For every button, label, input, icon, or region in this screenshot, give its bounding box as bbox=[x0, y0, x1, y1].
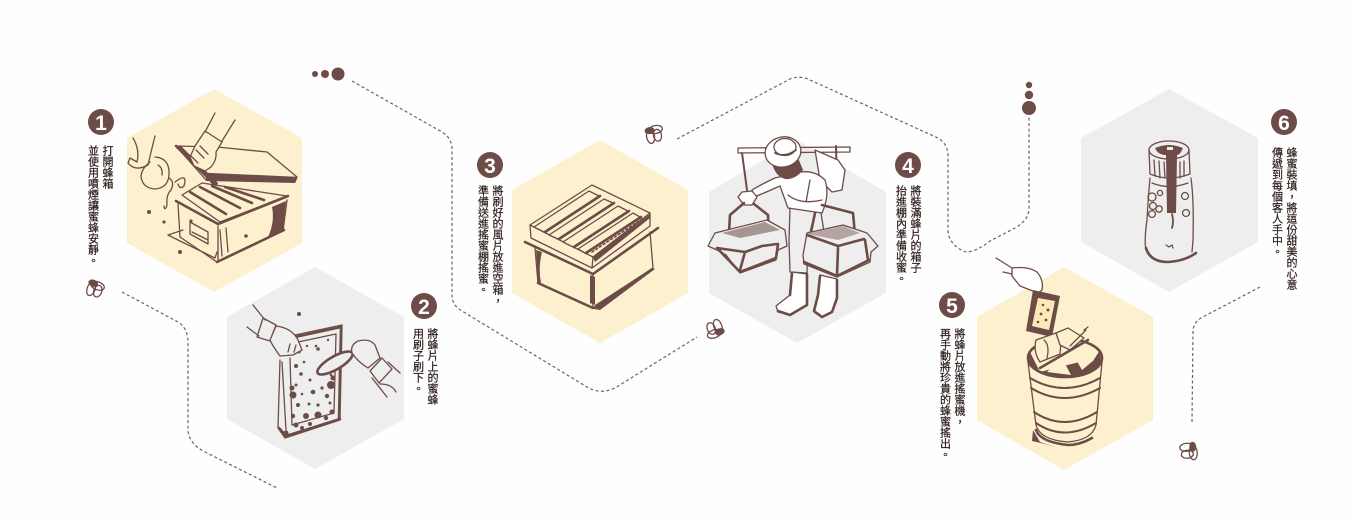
text: step 5: 將蜂片放進搖蜜機， bbox=[953, 328, 965, 427]
hexagon: step 5 bbox=[977, 267, 1153, 470]
number badge 4: 4 bbox=[902, 155, 914, 178]
shoulder pole and ropes bbox=[738, 147, 850, 153]
text: step 1: 並使用噴煙讓蜜蜂安靜。 bbox=[86, 145, 98, 266]
trousers bbox=[789, 208, 824, 273]
number badge 1 bbox=[88, 109, 114, 135]
hexagon: step 3 bbox=[512, 140, 688, 343]
frame bars bbox=[534, 191, 599, 232]
gloved hand on lid bbox=[190, 131, 222, 171]
right hand bbox=[352, 340, 380, 368]
left box bbox=[708, 220, 787, 273]
hooks bbox=[729, 203, 855, 235]
hexagon: step 6 bbox=[1081, 89, 1258, 292]
number badge 6 bbox=[1271, 109, 1297, 135]
gloved hand bbox=[738, 191, 757, 205]
smoker and smoke bbox=[128, 136, 155, 168]
hat bbox=[762, 134, 804, 170]
number badge 4 bbox=[895, 152, 921, 178]
backpack bbox=[815, 150, 845, 192]
illustration: honey jar bbox=[1145, 141, 1196, 262]
number badge 2: 2 bbox=[418, 296, 430, 319]
number badge 1: 1 bbox=[95, 112, 107, 135]
number badge 6: 6 bbox=[1278, 112, 1290, 135]
illustration: honey extractor with hand and frame bbox=[996, 258, 1102, 447]
brush bbox=[314, 347, 356, 379]
right box bbox=[803, 225, 878, 277]
text: step 6: 傳遞到每個客人手中。 bbox=[1270, 147, 1282, 257]
text: step 5: 再手動將珍貴的蜂蜜搖出。 bbox=[938, 328, 950, 460]
text: step 6: 蜂蜜裝填，將這份甜美的心意 bbox=[1285, 147, 1297, 290]
text: step 5 bbox=[938, 328, 966, 460]
dotted path: bee to lower left bbox=[122, 292, 277, 488]
boots bbox=[776, 272, 807, 315]
text: step 3: 將刷好的風片放進空箱， bbox=[491, 185, 503, 306]
icon: bee left bbox=[84, 278, 106, 299]
number badge 5 bbox=[939, 292, 965, 318]
honeycomb bbox=[592, 219, 647, 255]
illustration: beekeeper carrying boxes on shoulder pole bbox=[708, 134, 878, 317]
veil bbox=[772, 158, 803, 179]
illustration: opening the hive with smoker bbox=[128, 113, 297, 262]
text: step 3: 準備送進搖蜜棚搖蜜。 bbox=[476, 185, 488, 295]
text: step 6 bbox=[1270, 147, 1298, 290]
text: step 4 bbox=[894, 185, 922, 284]
illustration: brushing bees off the frame bbox=[247, 305, 400, 438]
number badge 2 bbox=[411, 293, 437, 319]
hexagon: step 4 bbox=[709, 140, 886, 343]
dotted path: dots to step 4 bee bbox=[352, 81, 697, 391]
dots: horizontal trio bbox=[312, 68, 344, 80]
text: step 1: 打開蜂箱 bbox=[101, 145, 113, 189]
illustration: frames in the box bbox=[525, 185, 658, 310]
text: step 4: 將裝滿蜂片的箱子 bbox=[909, 185, 921, 273]
hive top bars bbox=[182, 183, 287, 222]
left hand bbox=[257, 318, 276, 341]
hive body bbox=[176, 196, 288, 224]
dotted path: step 6 to bee bbox=[1192, 287, 1260, 422]
hive lid bbox=[176, 146, 297, 182]
hexagon: step 2 bbox=[227, 267, 404, 469]
number badge 3: 3 bbox=[484, 155, 496, 178]
icon: bee right bbox=[1179, 441, 1198, 461]
number badge 3 bbox=[477, 152, 503, 178]
text: step 2 bbox=[412, 328, 438, 405]
text: step 2: 將蜂片上的蜜蜂 bbox=[426, 328, 438, 405]
icon: bee lower bbox=[703, 318, 726, 340]
text: step 3 bbox=[476, 185, 504, 306]
number badge 5: 5 bbox=[946, 295, 958, 318]
text: step 2: 用刷子刷下。 bbox=[412, 328, 424, 394]
text: step 1 bbox=[86, 145, 114, 266]
dotted path: bee over step 4 to vertical dots bbox=[677, 77, 1029, 252]
text: step 4: 抬進棚內準備收蜜。 bbox=[894, 185, 906, 284]
hexagon: step 1 bbox=[127, 89, 302, 292]
dots: vertical trio bbox=[1022, 82, 1036, 115]
jacket bbox=[752, 172, 827, 213]
icon: bee top bbox=[644, 124, 665, 144]
